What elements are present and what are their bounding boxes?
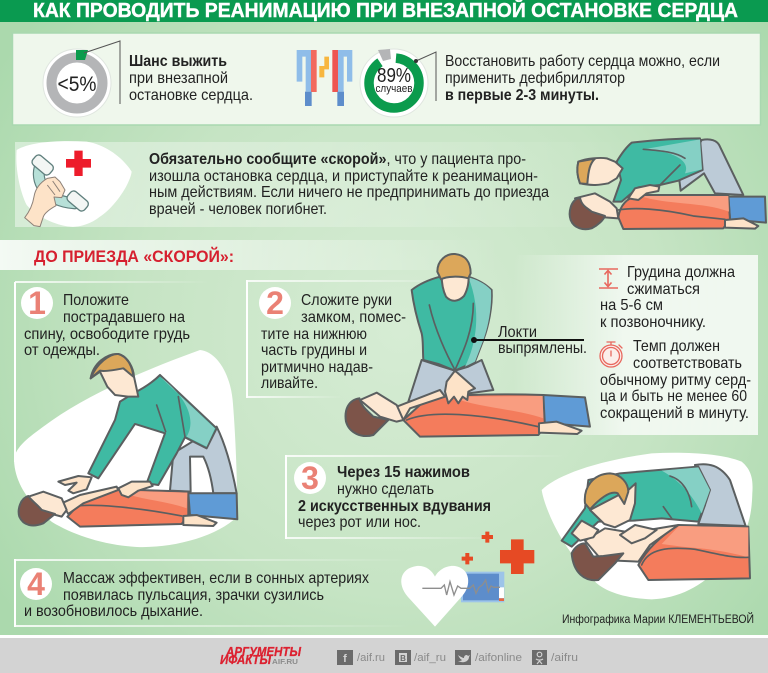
text: step 4: Массаж эффективен, если в сонных артериях: [63, 570, 369, 587]
text: compression rate: сокращений в минуту.: [600, 405, 749, 422]
panel: step 2: [246, 280, 462, 398]
text: inform the ambulance: изошла остановка сердца, и приступайте к реанимацион-: [149, 168, 538, 185]
text: step 2: тите на нижнюю: [261, 326, 367, 343]
logo: ИФАКТЫ: [220, 652, 272, 667]
chart: survival donut under 5 percent: [43, 41, 120, 117]
chart: survival donut under 5 percent: <5%: [58, 73, 96, 96]
social: twitter: /aifonline: [475, 652, 522, 664]
text: step 3: [298, 464, 491, 531]
number badge 1: 1: [28, 285, 46, 321]
illustration: chest compressions: [346, 254, 590, 437]
illustration: rescuer checking patient: [570, 138, 766, 229]
social: vk: /aif_ru: [414, 652, 446, 664]
social: odnoklassniki: /aifru: [551, 652, 578, 664]
icon: defibrillator pads: [297, 50, 352, 106]
text: step 1: Положите: [63, 292, 129, 309]
social: facebook: /aif.ru: [357, 652, 385, 664]
text: survival chance: Шанс выжить: [129, 53, 227, 70]
text: step 2: [261, 292, 406, 392]
social: twitter: [455, 650, 522, 665]
text: step 1: от одежды.: [24, 342, 100, 359]
credit: Инфографика Марии КЛЕМЕНТЬЕВОЙ: [562, 613, 754, 626]
panel: step 3: [285, 455, 570, 539]
text: defibrillator timing: в первые 2-3 минуты.: [445, 87, 599, 104]
number badge 3: [294, 460, 326, 496]
illustration: rescue breaths: [542, 453, 753, 599]
number badge 4: 4: [27, 566, 45, 602]
heading: before the ambulance arrives: ДО ПРИЕЗДА «СКОРОЙ»:: [34, 247, 234, 266]
text: compression depth: Грудина должна: [627, 264, 735, 281]
text: compression rate: обычному ритму серд-: [600, 372, 751, 389]
text: step 2: ритмично надав-: [261, 359, 373, 376]
number badge 2: 2: [266, 285, 284, 321]
text: step 3: через рот или нос.: [298, 514, 421, 531]
number badge 3: 3: [301, 460, 319, 496]
text: survival chance: при внезапной: [129, 70, 228, 87]
text: inform the ambulance: [149, 151, 549, 218]
social: facebook: f: [343, 653, 347, 665]
text: step 2: замком, помес-: [301, 309, 406, 326]
step 1 illustration: [14, 350, 237, 547]
title bar: КАК ПРОВОДИТЬ РЕАНИМАЦИЮ ПРИ ВНЕЗАПНОЙ ОСТАНОВКЕ СЕРДЦА: [33, 0, 738, 22]
social: vk: [395, 650, 446, 665]
text: step 3: 2 искусственных вдувания: [298, 498, 491, 515]
text: inform the ambulance: Обязательно сообщите «скорой», что у пациента про-: [149, 151, 526, 168]
icon: stopwatch: [600, 342, 622, 367]
footer: [0, 635, 768, 673]
text: compression depth: на 5-6 см: [600, 297, 663, 314]
text: compression depth: сжиматься: [627, 281, 700, 298]
icon: compression depth: [599, 269, 618, 288]
callout: elbows straight: [471, 324, 587, 357]
text: defibrillator timing: Восстановить работу сердца можно, если: [445, 53, 720, 70]
text: defibrillator timing: [445, 53, 720, 104]
icon: telephone with red cross: [16, 141, 132, 227]
social: vk: В: [400, 654, 406, 663]
text: compression depth: [600, 264, 735, 331]
text: step 4: и возобновилось дыхание.: [24, 603, 203, 620]
heading: before the ambulance arrives: [0, 240, 500, 270]
text: inform the ambulance: врачей - человек погибнет.: [149, 201, 327, 218]
text: step 1: [24, 292, 190, 359]
text: compression rate: Темп должен: [633, 338, 720, 355]
text: defibrillator timing: применить дефибриллятор: [445, 70, 625, 87]
text: step 2: ливайте.: [261, 375, 318, 392]
number badge 4: [20, 566, 52, 602]
text: step 2: часть грудины и: [261, 342, 367, 359]
number badge 1: [21, 285, 53, 321]
callout: elbows straight: выпрямлены.: [498, 340, 587, 357]
text: step 4: [24, 570, 369, 620]
text: step 1: пострадавшего на: [63, 309, 185, 326]
logo: АРГУМЕНТЫ: [225, 644, 302, 659]
panel: survival statistics: [12, 33, 760, 125]
text: survival chance: [129, 53, 253, 104]
text: compression rate: соответствовать: [633, 355, 742, 372]
logo: AIF.RU: [272, 659, 298, 666]
chart: donut 89 percent of cases: [360, 49, 436, 117]
chart: donut 89 percent of cases: 89%: [377, 65, 411, 87]
panel: call the ambulance: [15, 138, 766, 229]
text: compression depth: к позвоночнику.: [600, 314, 706, 331]
text: compression rate: [600, 338, 751, 422]
text: step 3: Через 15 нажимов: [337, 464, 470, 481]
text: inform the ambulance: ным действиям. Если ничего не предпринимать до приезда: [149, 184, 549, 201]
panel: step 1: [14, 281, 237, 547]
panel: compression guidance: [513, 255, 758, 435]
number badge 2: [259, 285, 291, 321]
text: survival chance: остановке сердца.: [129, 87, 253, 104]
logo: [220, 644, 302, 667]
social: odnoklassniki: [532, 650, 578, 665]
text: compression rate: ца и быть не менее 60: [600, 388, 747, 405]
chart: donut 89 percent of cases: случаев: [376, 83, 413, 95]
icon: heart with heart monitor and crosses: [401, 532, 534, 627]
panel: step 4: [14, 559, 410, 627]
text: step 2: Сложите руки: [301, 292, 392, 309]
callout: elbows straight: Локти: [498, 324, 537, 341]
social: facebook: [337, 650, 385, 665]
text: step 3: нужно сделать: [337, 481, 434, 498]
text: step 4: появилась пульсация, зрачки сузились: [63, 587, 324, 604]
text: step 1: спину, освободите грудь: [24, 326, 190, 343]
